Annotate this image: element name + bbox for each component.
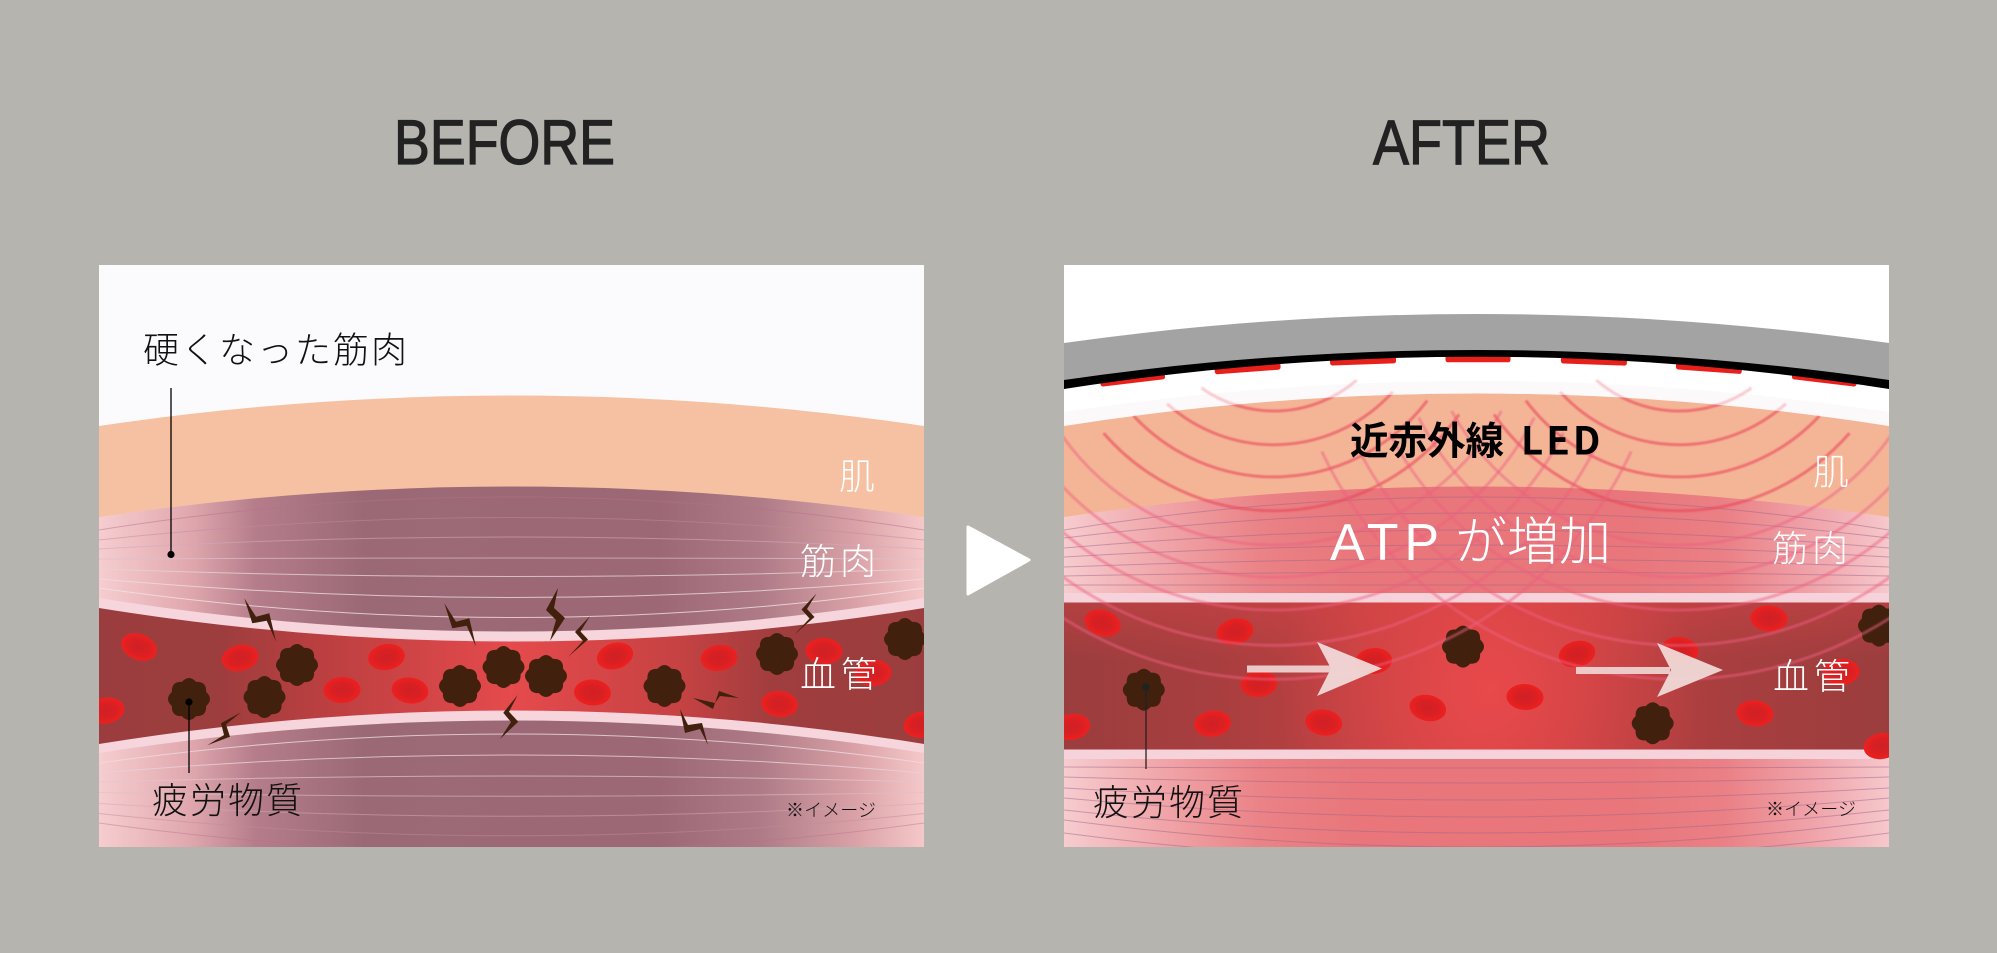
muscle layer [99,486,924,847]
white fade over wave tops [1064,374,1889,426]
device black edge [1064,350,1889,389]
red blood cells [1051,605,1902,762]
label: fatigue substance: 疲労物質 [1093,774,1243,826]
label: ATP increase: ATP [1330,514,1439,572]
muscle fibres [1064,497,1889,860]
arrow: before to after [968,527,1029,594]
flow arrow 1 [1247,642,1382,696]
near-infrared waves [1064,379,1889,682]
muscle fibres [99,497,924,852]
title: AFTER: AFTER [1373,108,1550,178]
LED lights [1100,356,1856,386]
callout line: fatigue substance [1142,683,1150,769]
label: skin: 肌 [839,448,875,500]
label: ATP increase: が増加 [1455,500,1611,575]
lightning bolts [207,588,817,745]
label: muscle: 筋肉 [1772,520,1848,572]
label: ATP increase [1330,516,1606,564]
label: skin: 肌 [1813,444,1849,496]
blood vessel [99,608,924,744]
note: image only: ※イメージ [1766,796,1856,822]
label: vessel: 血管 [800,646,877,698]
blood vessel [1064,602,1889,750]
skin layer [1064,394,1889,517]
label: near-infrared LED: LED [1521,410,1603,466]
label: near-infrared LED: 近赤外線 [1350,410,1504,466]
callout line: fatigue substance [185,698,193,773]
panel: after [1064,265,1889,847]
title: BEFORE: BEFORE [394,108,615,178]
vessel walls [1064,593,1889,759]
red blood cells [99,633,924,738]
skin layer [99,396,924,517]
muscle layer [1064,486,1889,847]
glow band above skin [1064,381,1889,430]
panel: before [86,265,942,852]
label: fatigue substance: 疲労物質 [152,772,302,824]
label: stiff muscle: 硬くなった筋肉 [143,322,407,374]
fatigue substances [168,618,926,720]
flow arrow 2 [1576,643,1723,697]
label: muscle: 筋肉 [800,533,876,585]
note: image only: ※イメージ [786,796,876,822]
label: vessel: 血管 [1773,648,1850,700]
device housing [1064,314,1889,384]
callout line: stiff muscle [167,388,175,558]
blood vessel walls [99,598,924,753]
fatigue substances [1123,605,1900,744]
